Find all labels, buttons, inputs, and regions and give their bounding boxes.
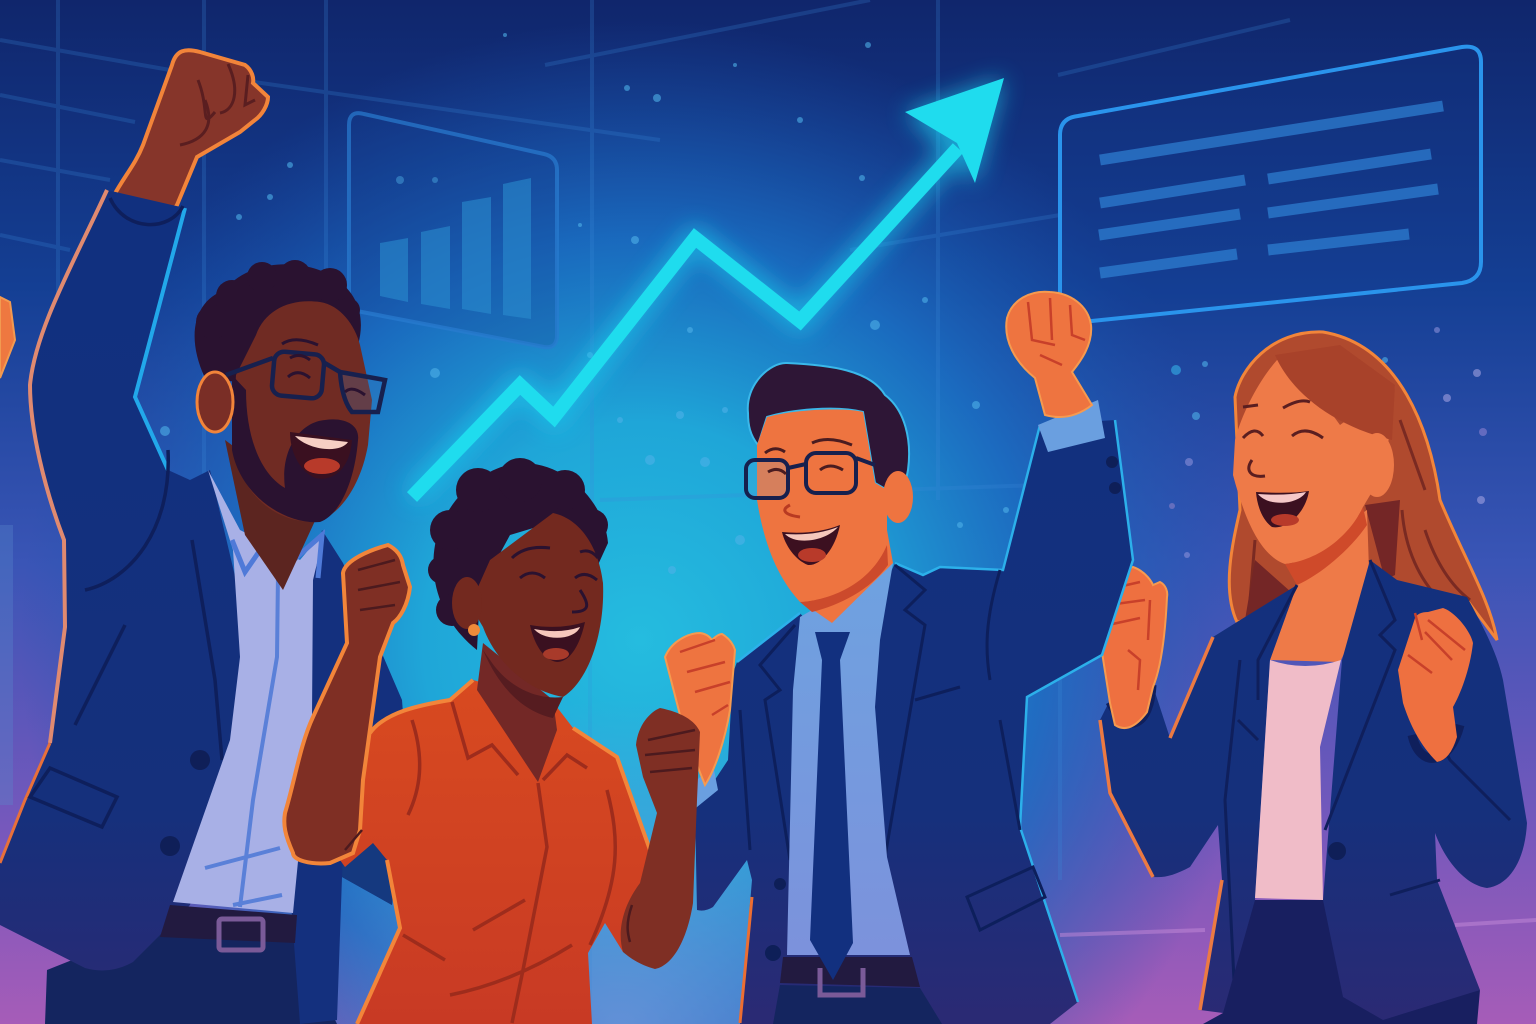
eyes and nose <box>1243 401 1323 476</box>
partial fist at left edge <box>0 297 15 378</box>
belt <box>160 905 297 950</box>
beard <box>232 375 358 522</box>
faded panel at far left <box>0 525 13 805</box>
right fist <box>1398 608 1473 762</box>
person 2: woman in orange shirt <box>284 458 700 1024</box>
jacket <box>0 190 405 1024</box>
face <box>1233 360 1395 564</box>
right arm and fist <box>621 708 700 969</box>
jacket <box>695 420 1133 1024</box>
long hair <box>1229 332 1497 640</box>
glasses <box>746 439 875 517</box>
person 3: man with glasses <box>665 292 1133 1024</box>
trousers <box>1203 900 1480 1024</box>
neck shadow <box>1285 507 1367 585</box>
ear <box>883 471 913 523</box>
eyes and brows <box>512 547 598 612</box>
person 1: man with raised fist <box>0 50 405 1024</box>
neck shadow <box>483 650 563 718</box>
top <box>1255 660 1341 900</box>
neck and chest <box>1270 510 1370 662</box>
text panel: dashboard <box>1060 47 1481 322</box>
face <box>757 409 887 602</box>
person 4: woman on the right <box>1095 332 1527 1024</box>
hair <box>748 363 909 490</box>
raised fist <box>1006 292 1092 417</box>
hair <box>195 260 361 385</box>
raised arm cuff <box>1038 400 1105 452</box>
hair <box>428 458 608 650</box>
growth arrow glow <box>412 78 1004 497</box>
glasses <box>226 340 385 412</box>
shirt <box>787 563 910 955</box>
mouth <box>782 525 840 565</box>
left fist <box>1095 567 1167 728</box>
mouth <box>290 432 352 479</box>
growth arrow <box>412 78 1004 497</box>
tie <box>810 632 853 980</box>
belt <box>780 957 920 995</box>
neck <box>477 643 557 782</box>
trousers <box>773 985 942 1024</box>
left arm <box>284 545 410 863</box>
neck <box>225 440 320 590</box>
mouth <box>1256 491 1309 527</box>
raised forearm and fist <box>113 50 268 219</box>
shirt <box>173 470 325 913</box>
mouth <box>530 622 585 662</box>
lower fist <box>665 633 735 785</box>
background particles <box>160 33 1487 574</box>
ear <box>197 372 233 432</box>
ear and earring <box>452 577 482 636</box>
hair shadow <box>1245 500 1400 625</box>
jacket <box>1100 560 1527 1022</box>
face <box>232 301 372 522</box>
left cuff <box>697 765 718 807</box>
fringe <box>1275 345 1395 440</box>
shirt <box>340 680 650 1024</box>
face <box>470 513 603 697</box>
ear <box>1360 433 1394 497</box>
chart panel: bar chart <box>349 113 557 347</box>
neck <box>800 530 893 623</box>
trousers <box>45 925 337 1024</box>
